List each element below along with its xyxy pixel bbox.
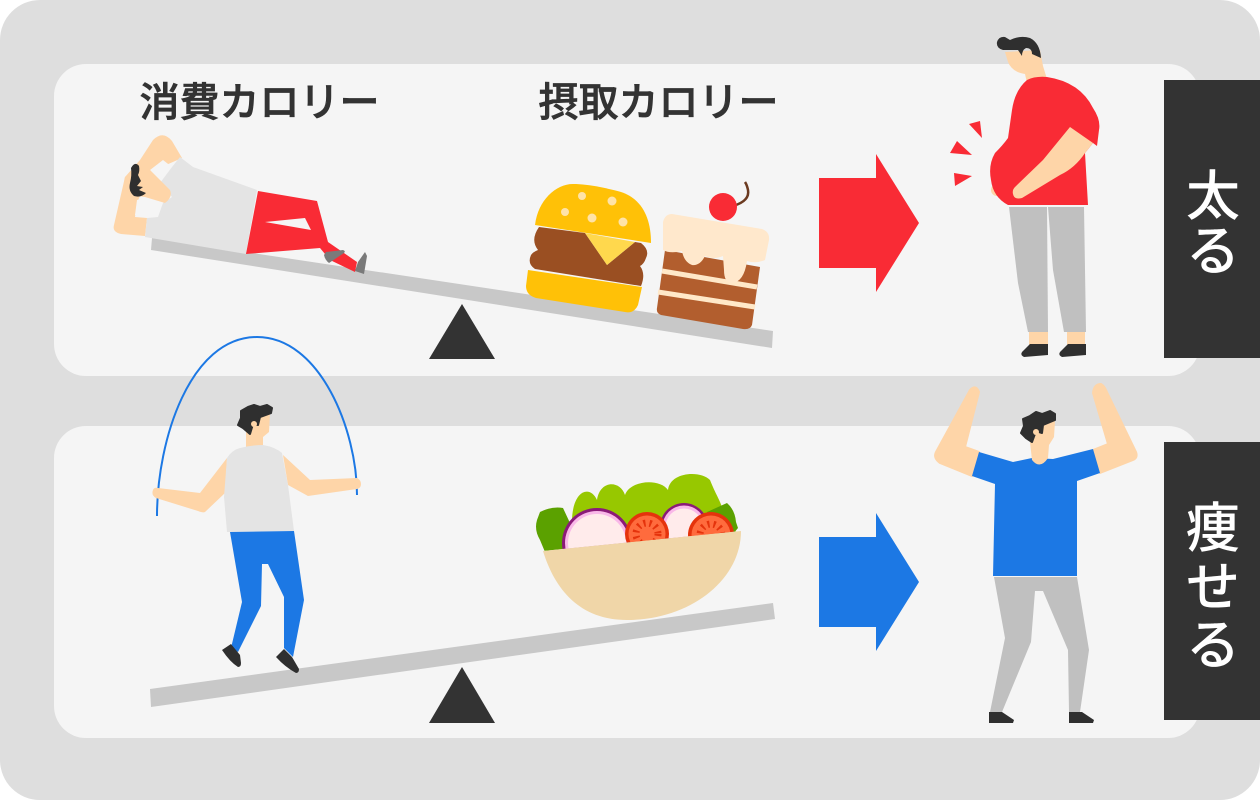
icon: cake with cherry — [657, 182, 769, 329]
icon: jump rope — [157, 337, 357, 516]
icon: man jumping rope — [152, 405, 361, 673]
panel: gain weight — [54, 64, 1200, 376]
panel: lose weight — [54, 426, 1200, 738]
icon: hamburger — [526, 184, 651, 312]
label: gain weight: 太 — [1186, 167, 1240, 227]
heading: calories consumed: 摂取カロリー — [538, 81, 778, 125]
label box: gain weight — [1164, 80, 1260, 358]
seesaw pivot: lose weight — [429, 667, 495, 723]
arrow: red — [819, 154, 919, 292]
label: lose weight: 痩 — [1186, 499, 1240, 559]
label: lose weight: せ — [1186, 558, 1240, 618]
seesaw beam: gain weight — [151, 238, 773, 348]
label: gain weight — [1186, 167, 1240, 282]
icon: man lying down — [114, 135, 367, 274]
label box: lose weight — [1164, 442, 1260, 720]
seesaw beam: lose weight — [150, 603, 775, 707]
label: lose weight: る — [1186, 616, 1240, 676]
icon: salad bowl — [536, 474, 741, 620]
seesaw pivot: gain weight — [429, 304, 495, 359]
icon: slim man — [935, 384, 1137, 723]
label: lose weight — [1186, 499, 1240, 676]
icon: overweight man — [990, 37, 1099, 357]
arrow: blue — [819, 513, 919, 651]
icon: emphasis sparks — [950, 121, 982, 186]
heading: calories burned: 消費カロリー — [140, 81, 380, 125]
label: gain weight: る — [1186, 222, 1240, 282]
